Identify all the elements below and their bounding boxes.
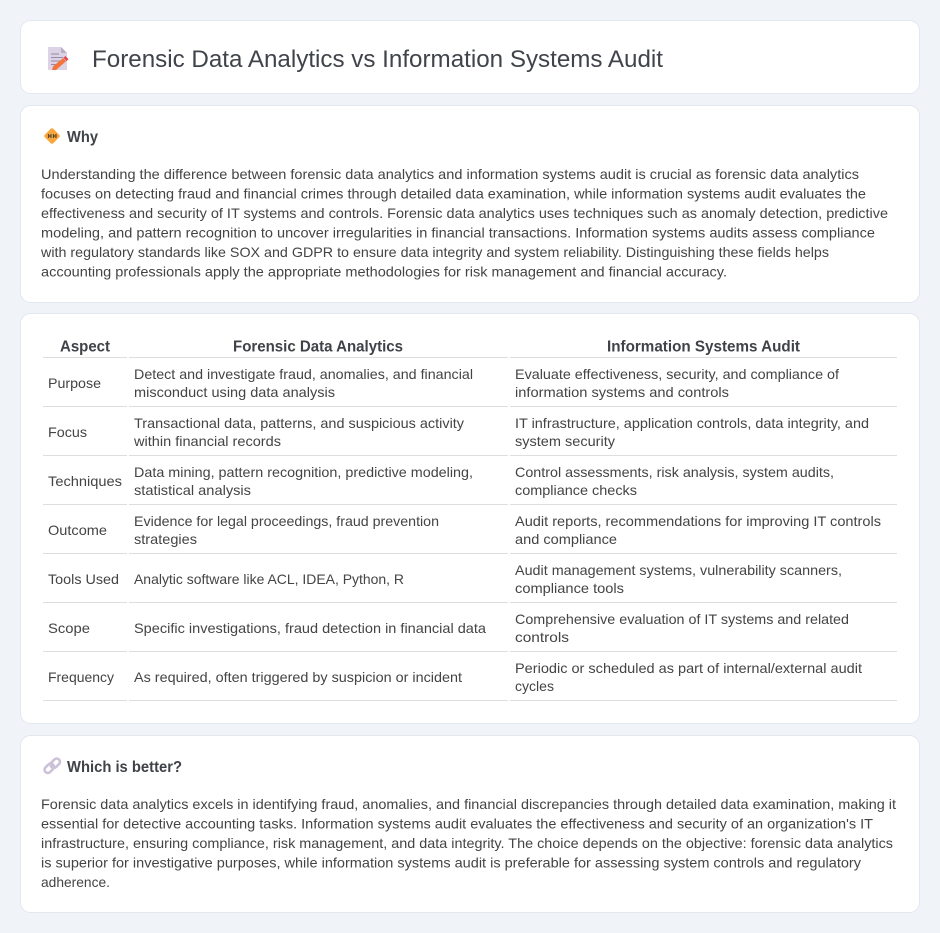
title: Forensic Data Analytics vs Information Systems Audit [92, 46, 663, 73]
row: focus: within financial records [133, 433, 281, 449]
row: focus: Focus [48, 424, 87, 440]
text block: which is better paragraph: is superior for investigative purposes, while information systems audit is preferable for assessing system controls and regulatory [41, 854, 861, 870]
icon: warning diamond [44, 128, 60, 144]
text block: which is better paragraph: infrastructure, ensuring compliance, risk management, and data integrity. The choice depends on the objective: forensic data analytics [41, 835, 893, 851]
table header [43, 338, 897, 358]
row: techniques: compliance checks [515, 482, 637, 498]
row: outcome: Evidence for legal proceedings, fraud prevention [134, 513, 439, 529]
icon: chain link [43, 757, 61, 774]
text block: which is better paragraph: essential for detective accounting tasks. Information systems audit evaluates the effectiveness and security of an organization's IT [41, 816, 873, 832]
row: frequency: As required, often triggered by suspicion or incident [134, 669, 462, 685]
row: frequency: cycles [515, 678, 554, 694]
text block: why paragraph: with regulatory standards like SOX and GDPR to ensure data integrity and system reliability. Distinguishing these fields helps [40, 244, 829, 260]
row: scope: controls [515, 629, 569, 645]
row: outcome: strategies [134, 531, 197, 547]
row: techniques [43, 464, 897, 504]
row: focus [43, 415, 897, 456]
row: scope [43, 611, 897, 652]
table header: Forensic Data Analytics [233, 338, 403, 356]
text block: why paragraph: Understanding the difference between forensic data analytics and information systems audit is crucial as forensic data analytics [41, 166, 859, 182]
text block: why paragraph: modeling, and pattern recognition to uncover irregularities in financial transactions. Information systems audits assess compliance [41, 224, 875, 240]
row: outcome: and compliance [515, 531, 617, 547]
row: purpose: Detect and investigate fraud, anomalies, and financial [134, 366, 473, 382]
row: tools used: Tools Used [48, 571, 119, 587]
panel: title header [20, 20, 920, 94]
text block: why paragraph [40, 166, 888, 280]
row: frequency: Frequency [48, 669, 114, 685]
row: purpose: Purpose [48, 375, 101, 391]
table header: Information Systems Audit [607, 338, 801, 356]
row: focus: Transactional data, patterns, and suspicious activity [134, 415, 464, 431]
row: outcome: Audit reports, recommendations for improving IT controls [515, 513, 881, 529]
text block: why paragraph: effectiveness and security of IT systems and controls. Forensic data analytics uses techniques such as anomaly detection, predictive [41, 205, 888, 221]
row: purpose [43, 366, 897, 406]
row: frequency: Periodic or scheduled as part of internal/external audit [515, 660, 862, 676]
panel: why [20, 106, 920, 302]
row: purpose: misconduct using data analysis [134, 384, 335, 400]
icon: memo with pencil [48, 47, 68, 70]
text block: which is better paragraph: Forensic data analytics excels in identifying fraud, anomalies, and financial discrepancies through detailed data examination, making it [41, 796, 896, 812]
row: techniques: Data mining, pattern recognition, predictive modeling, [134, 464, 473, 480]
row: outcome [43, 513, 897, 554]
heading: why: Why [67, 129, 98, 146]
row: focus: system security [515, 433, 615, 449]
row: techniques: statistical analysis [134, 482, 251, 498]
table header: Aspect [60, 338, 111, 356]
row: purpose: Evaluate effectiveness, security, and compliance of [515, 366, 839, 382]
row: tools used: compliance tools [515, 580, 624, 596]
row: tools used: Audit management systems, vulnerability scanners, [515, 562, 842, 578]
row: scope: Specific investigations, fraud detection in financial data [134, 620, 486, 636]
row: outcome: Outcome [48, 522, 107, 538]
panel: which is better [20, 736, 920, 912]
row: scope: Comprehensive evaluation of IT systems and related [515, 611, 849, 627]
row: scope: Scope [48, 620, 90, 636]
row: frequency [43, 660, 897, 700]
text block: why paragraph: focuses on detecting fraud and financial crimes through detailed data examination, while information systems audit evaluates the [41, 186, 866, 202]
text block: which is better paragraph: adherence. [41, 874, 110, 890]
row: tools used [43, 562, 897, 602]
panel: comparison table [20, 314, 920, 724]
heading: which is better: Which is better? [67, 759, 182, 776]
row: focus: IT infrastructure, application controls, data integrity, and [515, 415, 869, 431]
row: techniques: Control assessments, risk analysis, system audits, [515, 464, 834, 480]
text block: which is better paragraph [41, 796, 896, 890]
row: tools used: Analytic software like ACL, IDEA, Python, R [134, 571, 404, 587]
text block: why paragraph: accounting professionals apply the appropriate methodologies for risk management and financial accuracy. [41, 264, 727, 280]
row: techniques: Techniques [48, 473, 122, 489]
row: purpose: information systems and controls [515, 384, 729, 400]
